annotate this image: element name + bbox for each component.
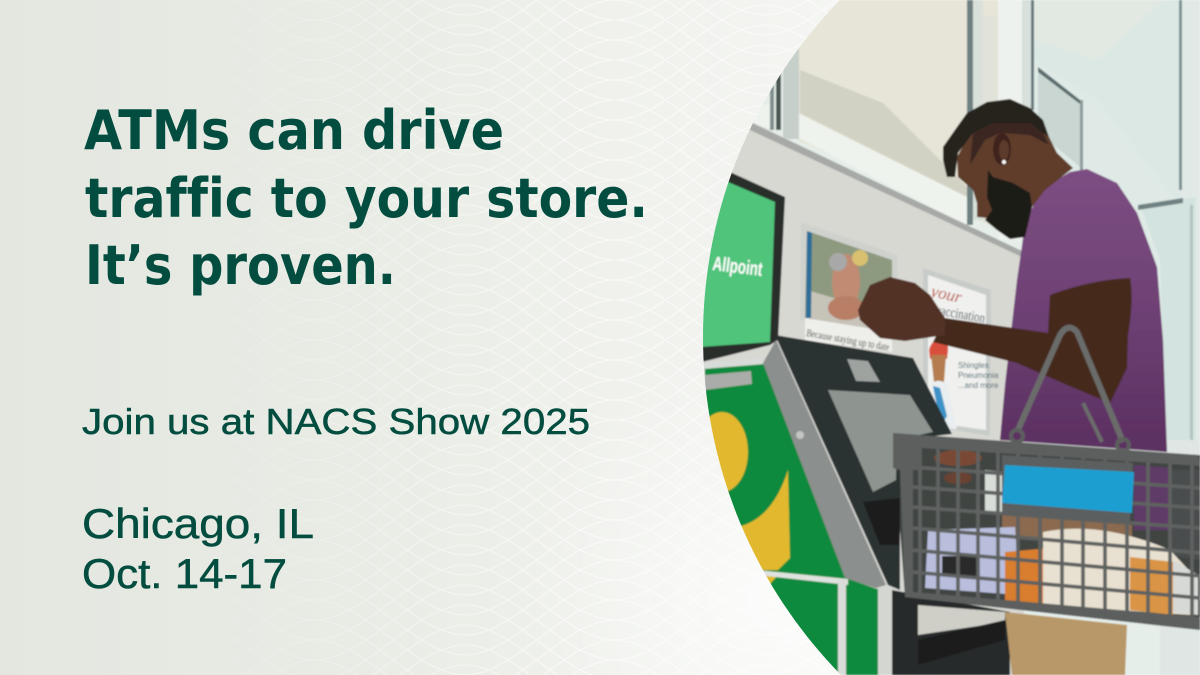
headline: ATMs can drive: [84, 99, 504, 162]
poster list: Shingles: [958, 361, 989, 370]
ATM base: [892, 590, 1010, 675]
poster caption: Because staying up to date: [805, 328, 890, 354]
location and dates: [82, 500, 314, 597]
poster list: ...and more: [958, 381, 999, 390]
ear: [993, 133, 1011, 165]
Allpoint logo: Allpoint: [711, 253, 764, 281]
location and dates: Chicago, IL: [82, 500, 314, 547]
digital screen: Allpoint: [700, 172, 785, 362]
headline: traffic to your store.: [85, 167, 648, 230]
shirt: [1000, 169, 1167, 452]
hand: [858, 277, 945, 341]
background panel: [0, 0, 841, 675]
basket contents: [900, 440, 1200, 630]
store window background: [758, 0, 1200, 675]
hair fade: [970, 123, 1049, 165]
neck and head: [956, 122, 1074, 219]
blue tag: [1002, 465, 1134, 513]
basket rim and frame: [893, 433, 1200, 630]
photo: shopper at Allpoint ATM: [696, 0, 1200, 675]
hair: [943, 99, 1049, 177]
poster: vaccination: vaccination: [934, 303, 986, 327]
basket grid: [912, 445, 1200, 626]
headline: It’s proven.: [85, 234, 396, 297]
dark fascia: [775, 335, 952, 590]
poster: photo of children: [800, 222, 898, 354]
poster heading: your: [927, 281, 964, 307]
store wall: [700, 115, 1024, 675]
ATM screen: [828, 390, 933, 492]
silver casing: [763, 340, 886, 588]
yellow shapes: [710, 410, 792, 584]
arm: [933, 278, 1132, 403]
poster illustration: doctor: [929, 340, 957, 429]
location and dates: Oct. 14-17: [82, 550, 287, 597]
beard: [985, 170, 1032, 239]
poster list: Pneumonia: [958, 371, 999, 380]
ATM machine: [696, 335, 1010, 675]
basket handles: [1017, 328, 1123, 442]
headline: [84, 99, 648, 297]
trousers: [1005, 612, 1127, 675]
shopping basket: [893, 328, 1200, 630]
poster: vaccination: [923, 268, 1001, 436]
invitation line: Join us at NACS Show 2025: [82, 401, 590, 442]
man: [858, 99, 1167, 675]
